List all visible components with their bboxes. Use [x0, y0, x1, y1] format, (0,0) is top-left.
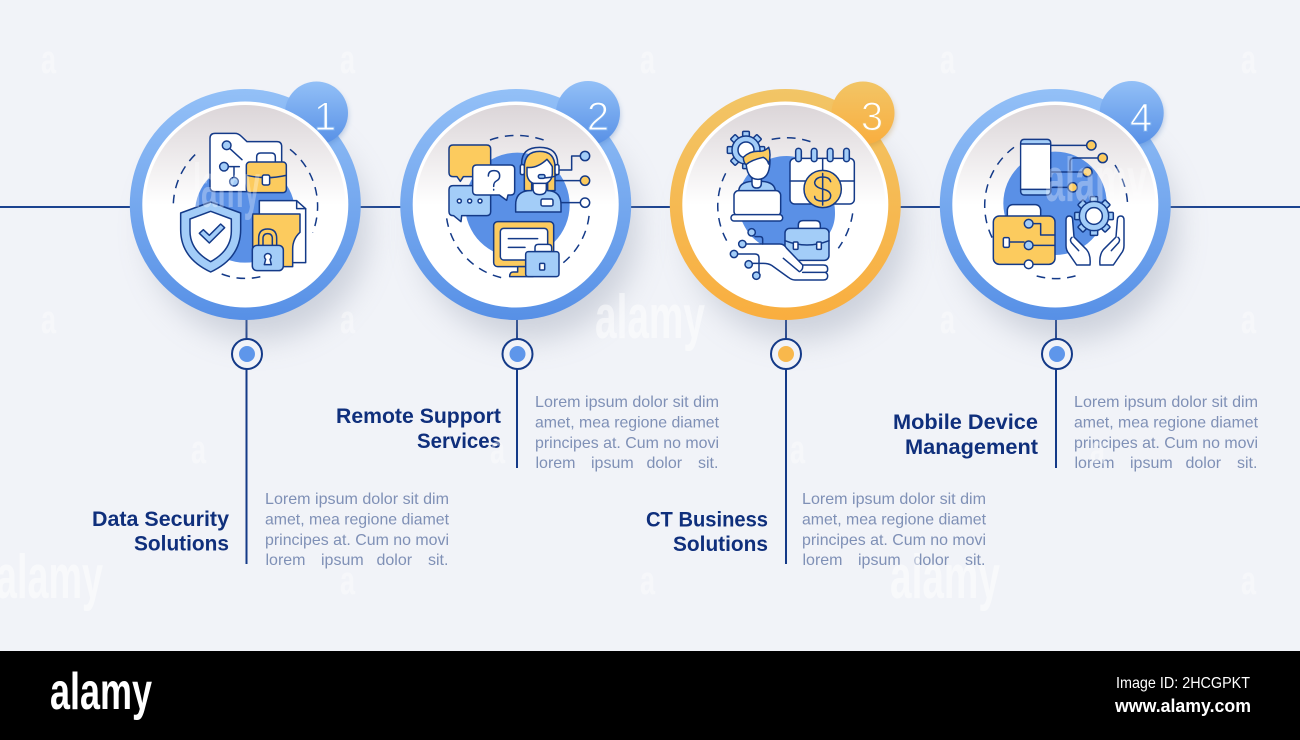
badge 4	[1100, 81, 1164, 146]
icon: remote support	[447, 135, 590, 279]
text block 1: amet, mea regione diamet	[265, 512, 450, 528]
heading: mobile device management	[893, 411, 1038, 459]
watermarks: a	[1241, 559, 1257, 603]
icon: data security	[173, 133, 318, 278]
badge 4: 4	[1130, 96, 1152, 140]
watermarks: a	[191, 428, 207, 472]
heading: data security solutions: Data Security	[92, 508, 229, 531]
text block 2: dolor	[646, 455, 683, 472]
heading: remote support services	[336, 405, 501, 453]
heading: data security solutions: Solutions	[134, 532, 229, 556]
watermarks: a	[41, 38, 57, 82]
text block 3: lorem	[802, 552, 843, 569]
node 2	[502, 339, 532, 369]
watermarks: a	[1241, 38, 1257, 82]
text block 1: lorem	[266, 552, 306, 569]
watermarks: a	[640, 559, 656, 603]
watermarks: a	[340, 559, 356, 603]
text block 3	[802, 491, 987, 569]
horizontal timeline	[0, 206, 1300, 208]
icon: IT business	[718, 131, 854, 280]
website: www.alamy.com	[1114, 696, 1251, 716]
vertical connector 4	[1055, 316, 1057, 468]
node 1	[232, 339, 262, 369]
watermarks: a	[940, 298, 956, 342]
text block 4: Lorem ipsum dolor sit dim	[1074, 394, 1258, 411]
watermarks: alamy	[1045, 146, 1147, 215]
text block 3: dolor	[914, 552, 950, 569]
text block 2: ipsum	[591, 455, 634, 472]
watermarks: lamy	[193, 152, 260, 221]
badge 2	[556, 81, 620, 146]
badge 1: 1	[314, 95, 336, 139]
badge 3: 3	[861, 95, 883, 139]
text block 3: Lorem ipsum dolor sit dim	[802, 491, 986, 508]
heading: mobile device management: Mobile Device	[893, 411, 1038, 434]
watermarks: a	[640, 38, 656, 82]
text block 3: sit.	[965, 552, 985, 569]
text block 1: principes at. Cum no movi	[265, 532, 449, 549]
text block 4: lorem	[1074, 455, 1115, 472]
watermarks: a	[340, 298, 356, 342]
text block 1: sit.	[428, 552, 448, 569]
image id: Image ID: 2HCGPKT	[1116, 675, 1250, 692]
step 1 circle	[130, 82, 368, 340]
watermarks	[0, 38, 1257, 612]
badge 2: 2	[587, 95, 609, 139]
text block 2: principes at. Cum no movi	[535, 435, 719, 452]
heading: remote support services: Remote Support	[336, 405, 501, 428]
footer logo: alamy	[50, 663, 152, 721]
vertical connector 3	[785, 316, 787, 564]
text block 3: ipsum	[858, 552, 901, 569]
icon: mobile device management	[985, 139, 1128, 279]
badge 3	[832, 82, 895, 146]
text block 1: ipsum	[321, 552, 364, 569]
heading: mobile device management: Management	[905, 436, 1038, 459]
step 3 circle	[670, 82, 908, 340]
step 2 circle	[400, 81, 638, 340]
text block 2: lorem	[536, 455, 576, 472]
footer band	[0, 651, 1300, 740]
node 4	[1042, 339, 1072, 369]
watermarks: a	[940, 38, 956, 82]
watermarks: a	[790, 428, 806, 472]
text block 4: ipsum	[1130, 455, 1173, 472]
watermarks: alamy	[0, 543, 103, 612]
watermarks: a	[41, 298, 57, 342]
text block 4: dolor	[1186, 455, 1222, 472]
heading: remote support services: Services	[417, 430, 501, 453]
heading: data security solutions	[92, 508, 229, 556]
heading: CT business solutions: CT Business	[646, 508, 768, 532]
text block 2: amet, mea regione diamet	[535, 414, 720, 432]
badge 1	[285, 82, 348, 146]
vertical connector 1	[246, 316, 248, 564]
watermarks: a	[340, 38, 356, 82]
heading: CT business solutions	[646, 508, 768, 556]
text block 1: dolor	[376, 552, 413, 569]
watermarks: a	[490, 428, 506, 472]
text block 2: Lorem ipsum dolor sit dim	[535, 394, 719, 411]
heading: CT business solutions: Solutions	[673, 533, 768, 556]
watermarks: alamy	[890, 543, 1000, 612]
watermarks: a	[1090, 428, 1106, 472]
text block 3: principes at. Cum no movi	[802, 532, 986, 549]
text block 2: sit.	[698, 455, 718, 472]
text block 4: principes at. Cum no movi	[1074, 435, 1258, 452]
watermarks: alamy	[595, 283, 705, 352]
text block 4: amet, mea regione diamet	[1074, 414, 1259, 432]
watermarks: a	[1241, 298, 1257, 342]
step 4 circle	[940, 81, 1178, 340]
text block 3: amet, mea regione diamet	[802, 512, 987, 528]
text block 1: Lorem ipsum dolor sit dim	[265, 491, 449, 508]
text block 4	[1074, 394, 1259, 472]
text block 2	[535, 394, 720, 472]
text block 1	[265, 491, 450, 569]
node 3	[771, 339, 801, 369]
vertical connector 2	[516, 316, 518, 468]
text block 4: sit.	[1237, 455, 1257, 472]
